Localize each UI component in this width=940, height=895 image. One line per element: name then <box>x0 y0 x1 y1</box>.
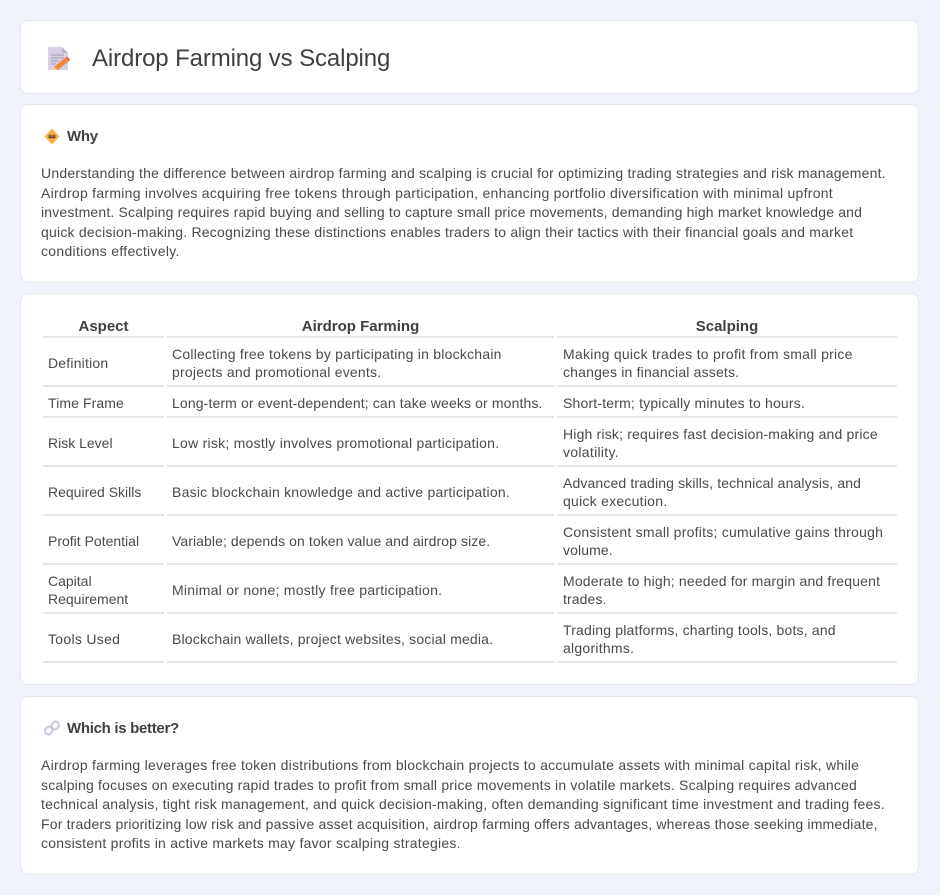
row: tools used: Tools Used <box>48 631 120 647</box>
icon: warning diamond <box>44 128 60 144</box>
row: definition: Collecting free tokens by participating in blockchain <box>172 346 502 362</box>
panel: title <box>20 20 919 94</box>
verdict paragraph: Airdrop farming leverages free token distributions from blockchain projects to accumulate assets with minimal capital risk, while <box>41 757 859 773</box>
heading: which is better: Which is better? <box>67 720 179 737</box>
row: capital requirement: Minimal or none; mostly free participation. <box>172 582 442 598</box>
icon: memo with pencil <box>48 47 70 70</box>
why paragraph: quick decision-making. Recognizing these distinctions enables traders to align their tactics with their financial goals and market <box>41 224 853 240</box>
row: time frame: Long-term or event-dependent; can take weeks or months. <box>172 395 543 411</box>
icon: chain link <box>44 720 60 736</box>
table header: Aspect <box>78 318 129 335</box>
row: definition: projects and promotional events. <box>172 364 381 380</box>
row: tools used: Blockchain wallets, project websites, social media. <box>172 631 493 647</box>
row: capital requirement <box>43 573 897 614</box>
row: required skills: Advanced trading skills, technical analysis, and <box>563 475 861 491</box>
panel: why <box>20 104 919 283</box>
row: definition <box>43 346 897 387</box>
heading: why: Why <box>67 128 98 145</box>
verdict paragraph: consistent profits in active markets may favor scalping strategies. <box>41 835 461 851</box>
row: profit potential: volume. <box>563 542 613 558</box>
why paragraph: Airdrop farming involves acquiring free tokens through participation, enhancing portfolio diversification with minimal upfront <box>41 185 833 201</box>
row: time frame <box>43 395 897 418</box>
row: definition: Making quick trades to profit from small price <box>563 346 853 362</box>
row: tools used: algorithms. <box>563 640 634 656</box>
row: required skills: Required Skills <box>48 484 141 500</box>
row: risk level: Low risk; mostly involves promotional participation. <box>172 435 499 451</box>
verdict paragraph <box>41 757 885 851</box>
row: profit potential: Variable; depends on token value and airdrop size. <box>172 533 490 549</box>
panel: which is better <box>20 696 919 875</box>
row: time frame: Time Frame <box>48 395 124 411</box>
row: time frame: Short-term; typically minutes to hours. <box>563 395 805 411</box>
row: risk level <box>43 426 897 467</box>
table header: Airdrop Farming <box>302 318 419 335</box>
row: required skills <box>43 475 897 516</box>
row: risk level: volatility. <box>563 444 619 460</box>
table header: Scalping <box>696 318 758 335</box>
main heading: Airdrop Farming vs Scalping <box>92 45 390 72</box>
panel: comparison table <box>20 293 919 685</box>
row: tools used <box>43 622 897 663</box>
row: capital requirement: trades. <box>563 591 606 607</box>
verdict paragraph: For traders prioritizing low risk and passive asset acquisition, airdrop farming offers advantages, whereas those seeking immediate, <box>41 816 878 832</box>
row: risk level: High risk; requires fast decision-making and price <box>563 426 878 442</box>
why paragraph <box>41 165 886 259</box>
verdict paragraph: scalping focuses on executing rapid trades to profit from small price movements in volatile markets. Scalping requires advanced <box>41 777 857 793</box>
row: required skills: quick execution. <box>563 493 667 509</box>
row: required skills: Basic blockchain knowledge and active participation. <box>172 484 510 500</box>
row: capital requirement: Capital <box>48 573 92 589</box>
table header <box>43 318 897 338</box>
why paragraph: investment. Scalping requires rapid buying and selling to capture small price movements, demanding high market knowledge and <box>41 204 862 220</box>
row: profit potential: Consistent small profits; cumulative gains through <box>563 524 883 540</box>
row: risk level: Risk Level <box>48 435 113 451</box>
row: capital requirement: Requirement <box>48 591 128 607</box>
verdict paragraph: technical analysis, tight risk management, and quick decision-making, often demanding significant time investment and trading fees. <box>41 796 885 812</box>
row: profit potential: Profit Potential <box>48 533 139 549</box>
row: profit potential <box>43 524 897 565</box>
row: definition: changes in financial assets. <box>563 364 739 380</box>
row: capital requirement: Moderate to high; needed for margin and frequent <box>563 573 880 589</box>
row: tools used: Trading platforms, charting tools, bots, and <box>563 622 836 638</box>
row: definition: Definition <box>48 355 108 371</box>
why paragraph: conditions effectively. <box>41 243 180 259</box>
why paragraph: Understanding the difference between airdrop farming and scalping is crucial for optimizing trading strategies and risk management. <box>41 165 886 181</box>
